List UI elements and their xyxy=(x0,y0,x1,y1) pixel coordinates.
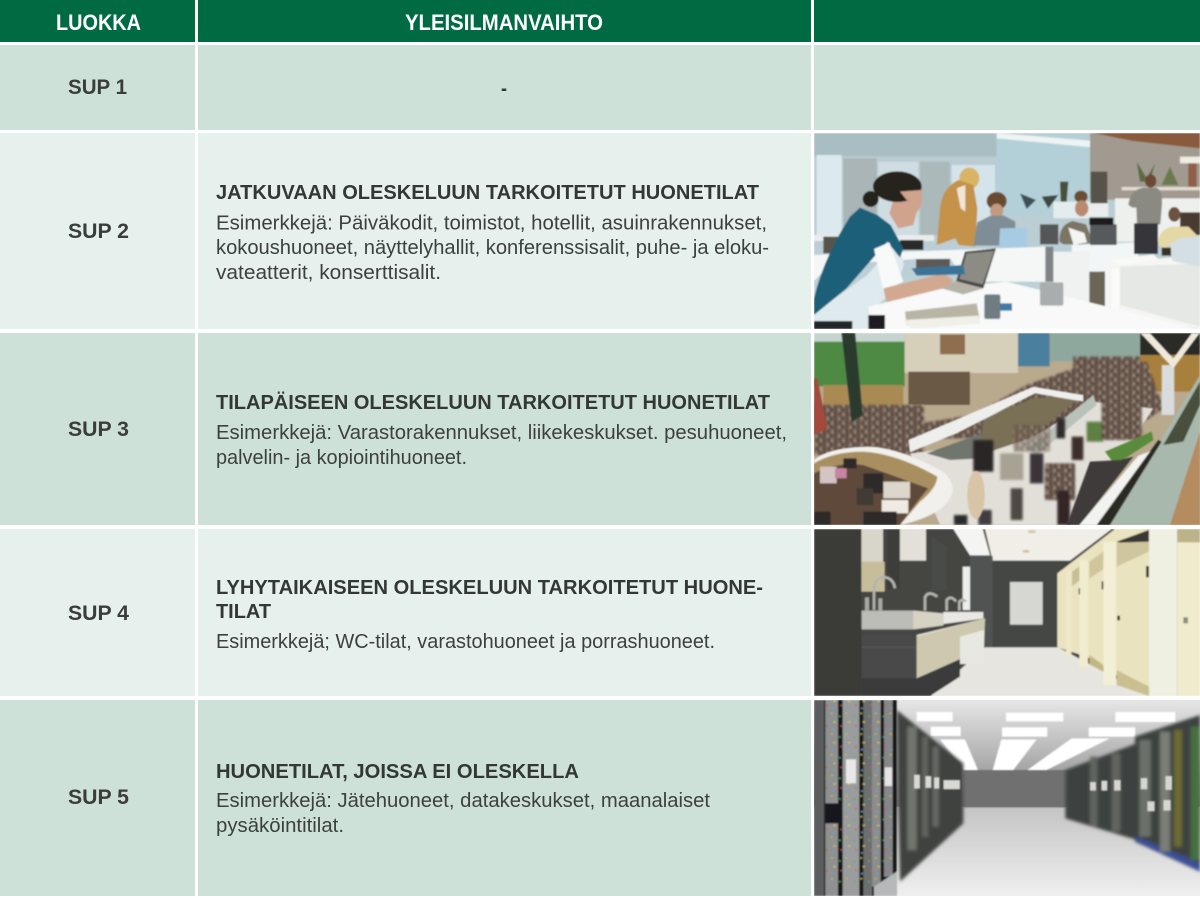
cafe xyxy=(814,447,953,525)
stalls xyxy=(1057,529,1149,696)
seated far right xyxy=(1168,207,1180,222)
text block: SUP 5 description: pysäköintitilat. xyxy=(216,815,344,837)
header: image column xyxy=(814,0,1200,42)
planter and right escalator xyxy=(1105,432,1153,465)
near left racks xyxy=(814,700,897,896)
middle rack highlights xyxy=(914,775,960,789)
seated back woman xyxy=(1074,191,1088,203)
text block: SUP 4 description: Esimerkkejä; WC-tilat, varastohuoneet ja porrashuoneet. xyxy=(216,631,715,653)
text block: SUP 4 description xyxy=(216,576,763,653)
photo: washroom xyxy=(814,529,1200,696)
text block: SUP 5 description: HUONETILAT, JOISSA EI OLESKELLA xyxy=(216,760,579,783)
photo: data centre xyxy=(814,700,1200,896)
taps xyxy=(874,577,966,611)
right rack highlights xyxy=(1090,776,1172,811)
floor xyxy=(931,647,1149,696)
ceiling lights xyxy=(917,712,1175,770)
header: yleisilmanvaihto: YLEISILMANVAIHTO xyxy=(405,10,603,35)
class label: SUP 3: SUP 3 xyxy=(68,418,129,441)
row: SUP 3 xyxy=(0,333,1200,525)
row: SUP 4 xyxy=(0,529,1200,696)
class label: SUP 1: SUP 1 xyxy=(68,76,127,99)
row: SUP 1 xyxy=(0,45,1200,130)
walkway bridge xyxy=(908,387,1083,452)
text block: SUP 2 description: vateatterit, konserttisalit. xyxy=(216,262,441,284)
photo: shopping centre xyxy=(814,333,1200,525)
people on floor xyxy=(954,397,1142,525)
back wall xyxy=(993,561,1063,647)
header: luokka xyxy=(0,0,195,42)
text block: SUP 2 description: kokoushuoneet, näyttelyhallit, konferenssisalit, puhe- ja eloku- xyxy=(216,237,769,259)
front desk xyxy=(868,282,1197,329)
main woman xyxy=(889,187,922,228)
middle left racks xyxy=(897,710,963,882)
text block: SUP 3 description xyxy=(216,391,787,469)
desks back xyxy=(814,235,934,241)
text block: SUP 2 description: Esimerkkejä: Päiväkodit, toimistot, hotellit, asuinrakennukset, xyxy=(216,212,767,234)
text block: SUP 3 description: TILAPÄISEEN OLESKELUUN TARKOITETUT HUONETILAT xyxy=(216,391,770,414)
text block: SUP 5 description xyxy=(216,760,710,837)
text block: SUP 2 description: JATKUVAAN OLESKELUUN TARKOITETUT HUONETILAT xyxy=(216,181,759,204)
curly man xyxy=(987,192,1007,210)
class label: SUP 2: SUP 2 xyxy=(68,220,129,243)
photo: open-plan office xyxy=(814,133,1200,329)
text block: SUP 2 description xyxy=(216,181,769,284)
row: SUP 5 xyxy=(0,700,1200,896)
concourse floor xyxy=(910,402,1153,525)
header: luokka: LUOKKA xyxy=(56,10,141,35)
blonde woman xyxy=(959,168,979,189)
header row xyxy=(0,0,1200,42)
header: yleisilmanvaihto xyxy=(198,0,811,42)
class label: SUP 4: SUP 4 xyxy=(68,602,129,625)
row: SUP 2 xyxy=(0,133,1200,329)
text block: SUP 4 description: LYHYTAIKAISEEN OLESKELUUN TARKOITETUT HUONE- xyxy=(216,576,763,599)
class label: SUP 5: SUP 5 xyxy=(68,786,129,809)
crowd texture xyxy=(814,357,1163,455)
text block: SUP 4 description: TILAT xyxy=(216,600,271,623)
text block: SUP 3 description: Esimerkkejä: Varastorakennukset, liikekeskukset. pesuhuoneet, xyxy=(216,422,787,444)
left pillar xyxy=(814,529,861,696)
empty value dash: - xyxy=(501,77,507,100)
standing man right xyxy=(1145,174,1156,188)
mirrors xyxy=(861,529,883,566)
text block: SUP 5 description: Esimerkkejä: Jätehuoneet, datakeskukset, maanalaiset xyxy=(216,790,710,812)
vanity xyxy=(862,618,985,637)
text block: SUP 3 description: palvelin- ja kopiointihuoneet. xyxy=(216,447,467,469)
right racks xyxy=(1065,715,1200,872)
ceiling xyxy=(985,529,1112,561)
